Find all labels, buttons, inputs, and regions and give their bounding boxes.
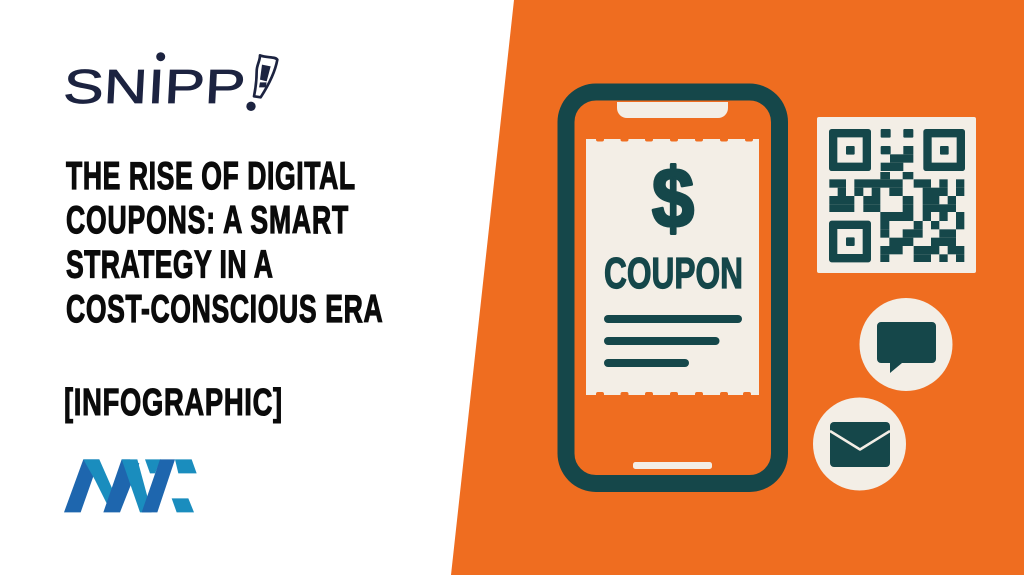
icon: chat bubble xyxy=(860,298,952,391)
phone notch xyxy=(617,102,728,118)
coupon ticket xyxy=(586,137,759,397)
logo: Snipp xyxy=(62,52,277,114)
title: COUPONS: A SMART xyxy=(66,199,348,242)
qr code xyxy=(817,117,976,273)
coupon text lines xyxy=(604,315,742,367)
icon: envelope xyxy=(813,398,906,490)
title: COST-CONSCIOUS ERA xyxy=(66,288,383,331)
phone home bar xyxy=(633,462,712,469)
infographic tag: [INFOGRAPHIC] xyxy=(64,382,282,424)
coupon label: COUPON xyxy=(604,249,743,298)
phone xyxy=(566,92,780,484)
logo: Snipp: SNIPP xyxy=(62,61,247,114)
orange slanted background panel xyxy=(451,0,1024,575)
logo: MTC xyxy=(64,459,197,512)
title xyxy=(66,155,383,331)
title: THE RISE OF DIGITAL xyxy=(66,155,355,198)
phone body xyxy=(566,92,780,484)
title: STRATEGY IN A xyxy=(66,244,273,287)
dollar sign: $ xyxy=(652,151,694,245)
